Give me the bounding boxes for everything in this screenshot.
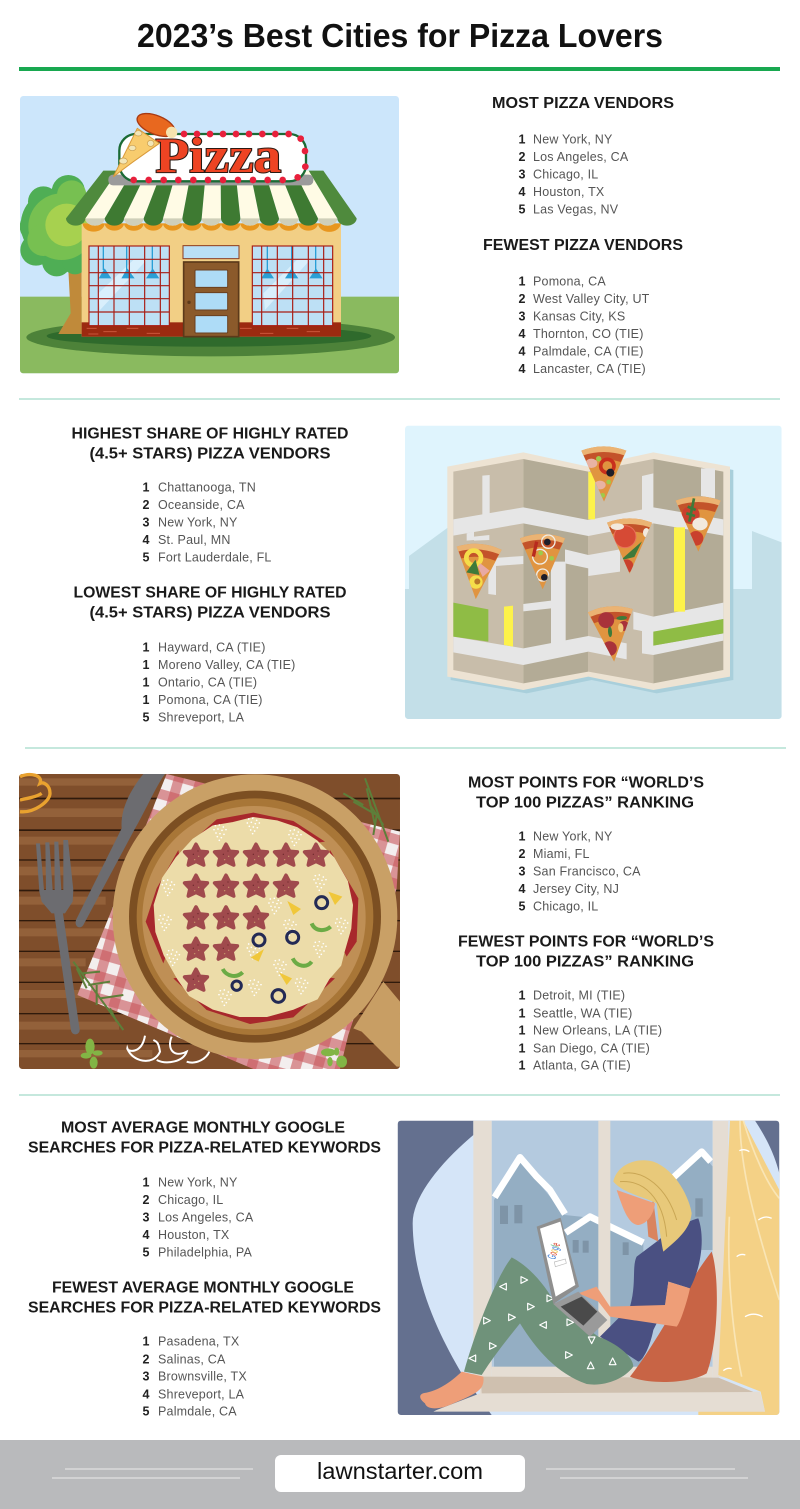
ranking list: Miami, FL [533,847,590,861]
onion rings [127,1036,209,1063]
ranking list: New York, NY [533,132,613,146]
ranking list: San Francisco, CA [533,864,641,878]
ranking list: Las Vegas, NV [533,202,619,216]
ranking list: Fort Lauderdale, FL [158,550,272,564]
ranking list: 1 [143,658,150,672]
panel: map illustration [405,426,782,719]
ranking list: 1 [519,830,526,844]
ranking list: 4 [519,344,526,358]
heading: MOST POINTS FOR “WORLD’S [468,774,704,792]
section: fewest points [458,934,714,1072]
ranking list: 2 [519,292,526,306]
ranking list: Pomona, CA [533,274,606,288]
ranking list: San Diego, CA (TIE) [533,1042,650,1056]
ranking list: Oceanside, CA [158,498,245,512]
ranking list [519,132,629,216]
footer pill [275,1455,525,1492]
ranking list: 5 [143,1246,150,1260]
basil [81,1039,347,1069]
beanbag [630,1252,717,1382]
ranking list: Detroit, MI (TIE) [533,988,625,1002]
section: lowest share [74,584,346,724]
pineapple [251,892,342,985]
knife [76,774,165,927]
heading: TOP 100 PIZZAS” RANKING [476,794,694,812]
arm [578,1282,690,1327]
ranking list [519,988,662,1072]
fork [36,840,75,1030]
ranking list: 4 [519,185,526,199]
section: most pizza vendors [492,95,674,216]
cheese specks [158,817,348,1006]
ranking list: 2 [519,150,526,164]
ranking list: 5 [519,202,526,216]
ranking list: 2 [519,847,526,861]
ranking list: 3 [143,1370,150,1384]
footer [0,1440,800,1509]
ranking list: 2 [143,1193,150,1207]
ranking list [143,1176,254,1260]
ranking list: West Valley City, UT [533,292,650,306]
heading: FEWEST POINTS FOR “WORLD’S [458,934,714,950]
door [183,246,239,337]
rosemary [73,778,388,1030]
ranking list: Pomona, CA (TIE) [158,693,263,707]
title: 2023’s Best Cities for Pizza Lovers [137,17,663,54]
ranking list: Houston, TX [533,185,605,199]
heading: (4.5+ STARS) PIZZA VENDORS [90,604,331,622]
heading [458,934,714,970]
heading: HIGHEST SHARE OF HIGHLY RATED [72,426,348,442]
tomato sauce [146,813,358,1024]
shirt [600,1218,702,1362]
ranking list: 1 [143,1176,150,1190]
ranking list: 1 [519,1024,526,1038]
panel: pizza on table illustration [19,774,400,1069]
pizza sign [108,109,313,185]
ranking list: Shreveport, LA [158,1388,245,1402]
ranking list: 1 [519,988,526,1002]
title underline [19,67,780,71]
ranking list: Thornton, CO (TIE) [533,327,644,341]
ranking list: Brownsville, TX [158,1370,247,1384]
ranking list: New Orleans, LA (TIE) [533,1024,662,1038]
heading [74,584,346,622]
ranking list: Pasadena, TX [158,1334,240,1348]
ranking list: 3 [519,864,526,878]
green peppers [223,923,331,976]
footer url: lawnstarter.com [317,1458,483,1484]
ranking list [519,830,641,914]
section: highest share [72,426,348,564]
laptop [537,1218,607,1337]
awning [66,171,357,232]
yellow pepper ring [20,775,50,812]
heading: LOWEST SHARE OF HIGHLY RATED [74,584,346,602]
ranking list: Kansas City, KS [533,310,625,324]
heading [468,774,704,812]
pizza slice 6 [588,606,633,662]
ranking list: New York, NY [158,1176,238,1190]
ranking list: 1 [519,132,526,146]
ranking list [519,274,650,376]
pizza slice 2 [676,496,721,552]
heading [28,1120,381,1156]
cheese [155,818,352,1016]
ranking list: 5 [143,710,150,724]
section: fewest searches [28,1280,381,1418]
ranking list [143,640,296,724]
ranking list: 1 [143,693,150,707]
ranking list: Los Angeles, CA [158,1210,254,1224]
ranking list: New York, NY [158,516,238,530]
ranking list: Chicago, IL [533,900,598,914]
heading: SEARCHES FOR PIZZA-RELATED KEYWORDS [28,1300,381,1316]
laptop: Google [545,1241,563,1261]
ranking list: 1 [519,274,526,288]
heading: TOP 100 PIZZAS” RANKING [476,954,694,970]
pizza slice 1 [581,446,626,502]
ranking list: Chicago, IL [158,1193,223,1207]
heading: FEWEST AVERAGE MONTHLY GOOGLE [52,1280,354,1296]
pizza slice 3 [607,518,652,574]
heading: MOST AVERAGE MONTHLY GOOGLE [61,1120,345,1136]
ranking list: 4 [143,533,150,547]
heading [72,426,348,462]
ranking list: Chattanooga, TN [158,480,256,494]
ranking list: Philadelphia, PA [158,1246,252,1260]
ranking list: Jersey City, NJ [533,882,619,896]
ranking list: 4 [143,1228,150,1242]
trousers [464,1257,633,1385]
right window [252,246,333,326]
ranking list: 4 [519,362,526,376]
heading: MOST PIZZA VENDORS [492,95,674,112]
pizza slice 5 [456,544,502,599]
panel: woman with laptop illustration [398,1121,779,1415]
heading [28,1280,381,1316]
ranking list [143,1334,247,1418]
ranking list: Chicago, IL [533,168,598,182]
ranking list: 4 [143,1388,150,1402]
section: most searches [28,1120,381,1260]
ranking list: 3 [519,310,526,324]
heading: (4.5+ STARS) PIZZA VENDORS [90,446,331,462]
head and hair [613,1160,692,1252]
ranking list: 1 [519,1058,526,1072]
pizza slice 4 [520,534,565,589]
ranking list: Ontario, CA (TIE) [158,676,257,690]
ranking list: Houston, TX [158,1228,230,1242]
ranking list: 4 [519,327,526,341]
ranking list: 3 [143,1210,150,1224]
ranking list: Hayward, CA (TIE) [158,640,266,654]
ranking list: Los Angeles, CA [533,150,629,164]
heading: FEWEST PIZZA VENDORS [483,237,683,254]
ranking list: 3 [143,516,150,530]
pizza board [113,774,397,1059]
ranking list: 1 [519,1006,526,1020]
ranking list: Lancaster, CA (TIE) [533,362,646,376]
ranking list: 3 [519,168,526,182]
ranking list: Moreno Valley, CA (TIE) [158,658,296,672]
ranking list: St. Paul, MN [158,533,231,547]
ranking list: Palmdale, CA (TIE) [533,344,644,358]
olives [232,897,328,1002]
ranking list: 5 [143,1404,150,1418]
left window [89,246,169,326]
foot [420,1372,484,1408]
pizza sign: Pizza [155,127,281,183]
pepperoni stars [185,844,327,990]
ranking list: Shreveport, LA [158,710,245,724]
section: fewest pizza vendors [483,237,683,376]
ranking list: 2 [143,498,150,512]
ranking list [143,480,272,564]
ranking list: 5 [519,900,526,914]
ranking list: Atlanta, GA (TIE) [533,1058,631,1072]
ranking list: Palmdale, CA [158,1404,237,1418]
ranking list: 1 [143,480,150,494]
ranking list: Seattle, WA (TIE) [533,1006,632,1020]
panel: pizza shop illustration [20,96,399,373]
ranking list: 1 [143,1334,150,1348]
ranking list: 5 [143,550,150,564]
ranking list: 1 [143,640,150,654]
ranking list: 1 [519,1042,526,1056]
ranking list: Salinas, CA [158,1352,226,1366]
ranking list: 2 [143,1352,150,1366]
heading: SEARCHES FOR PIZZA-RELATED KEYWORDS [28,1140,381,1156]
ranking list: 4 [519,882,526,896]
ranking list: New York, NY [533,830,613,844]
section: most points [468,774,704,914]
ranking list: 1 [143,676,150,690]
